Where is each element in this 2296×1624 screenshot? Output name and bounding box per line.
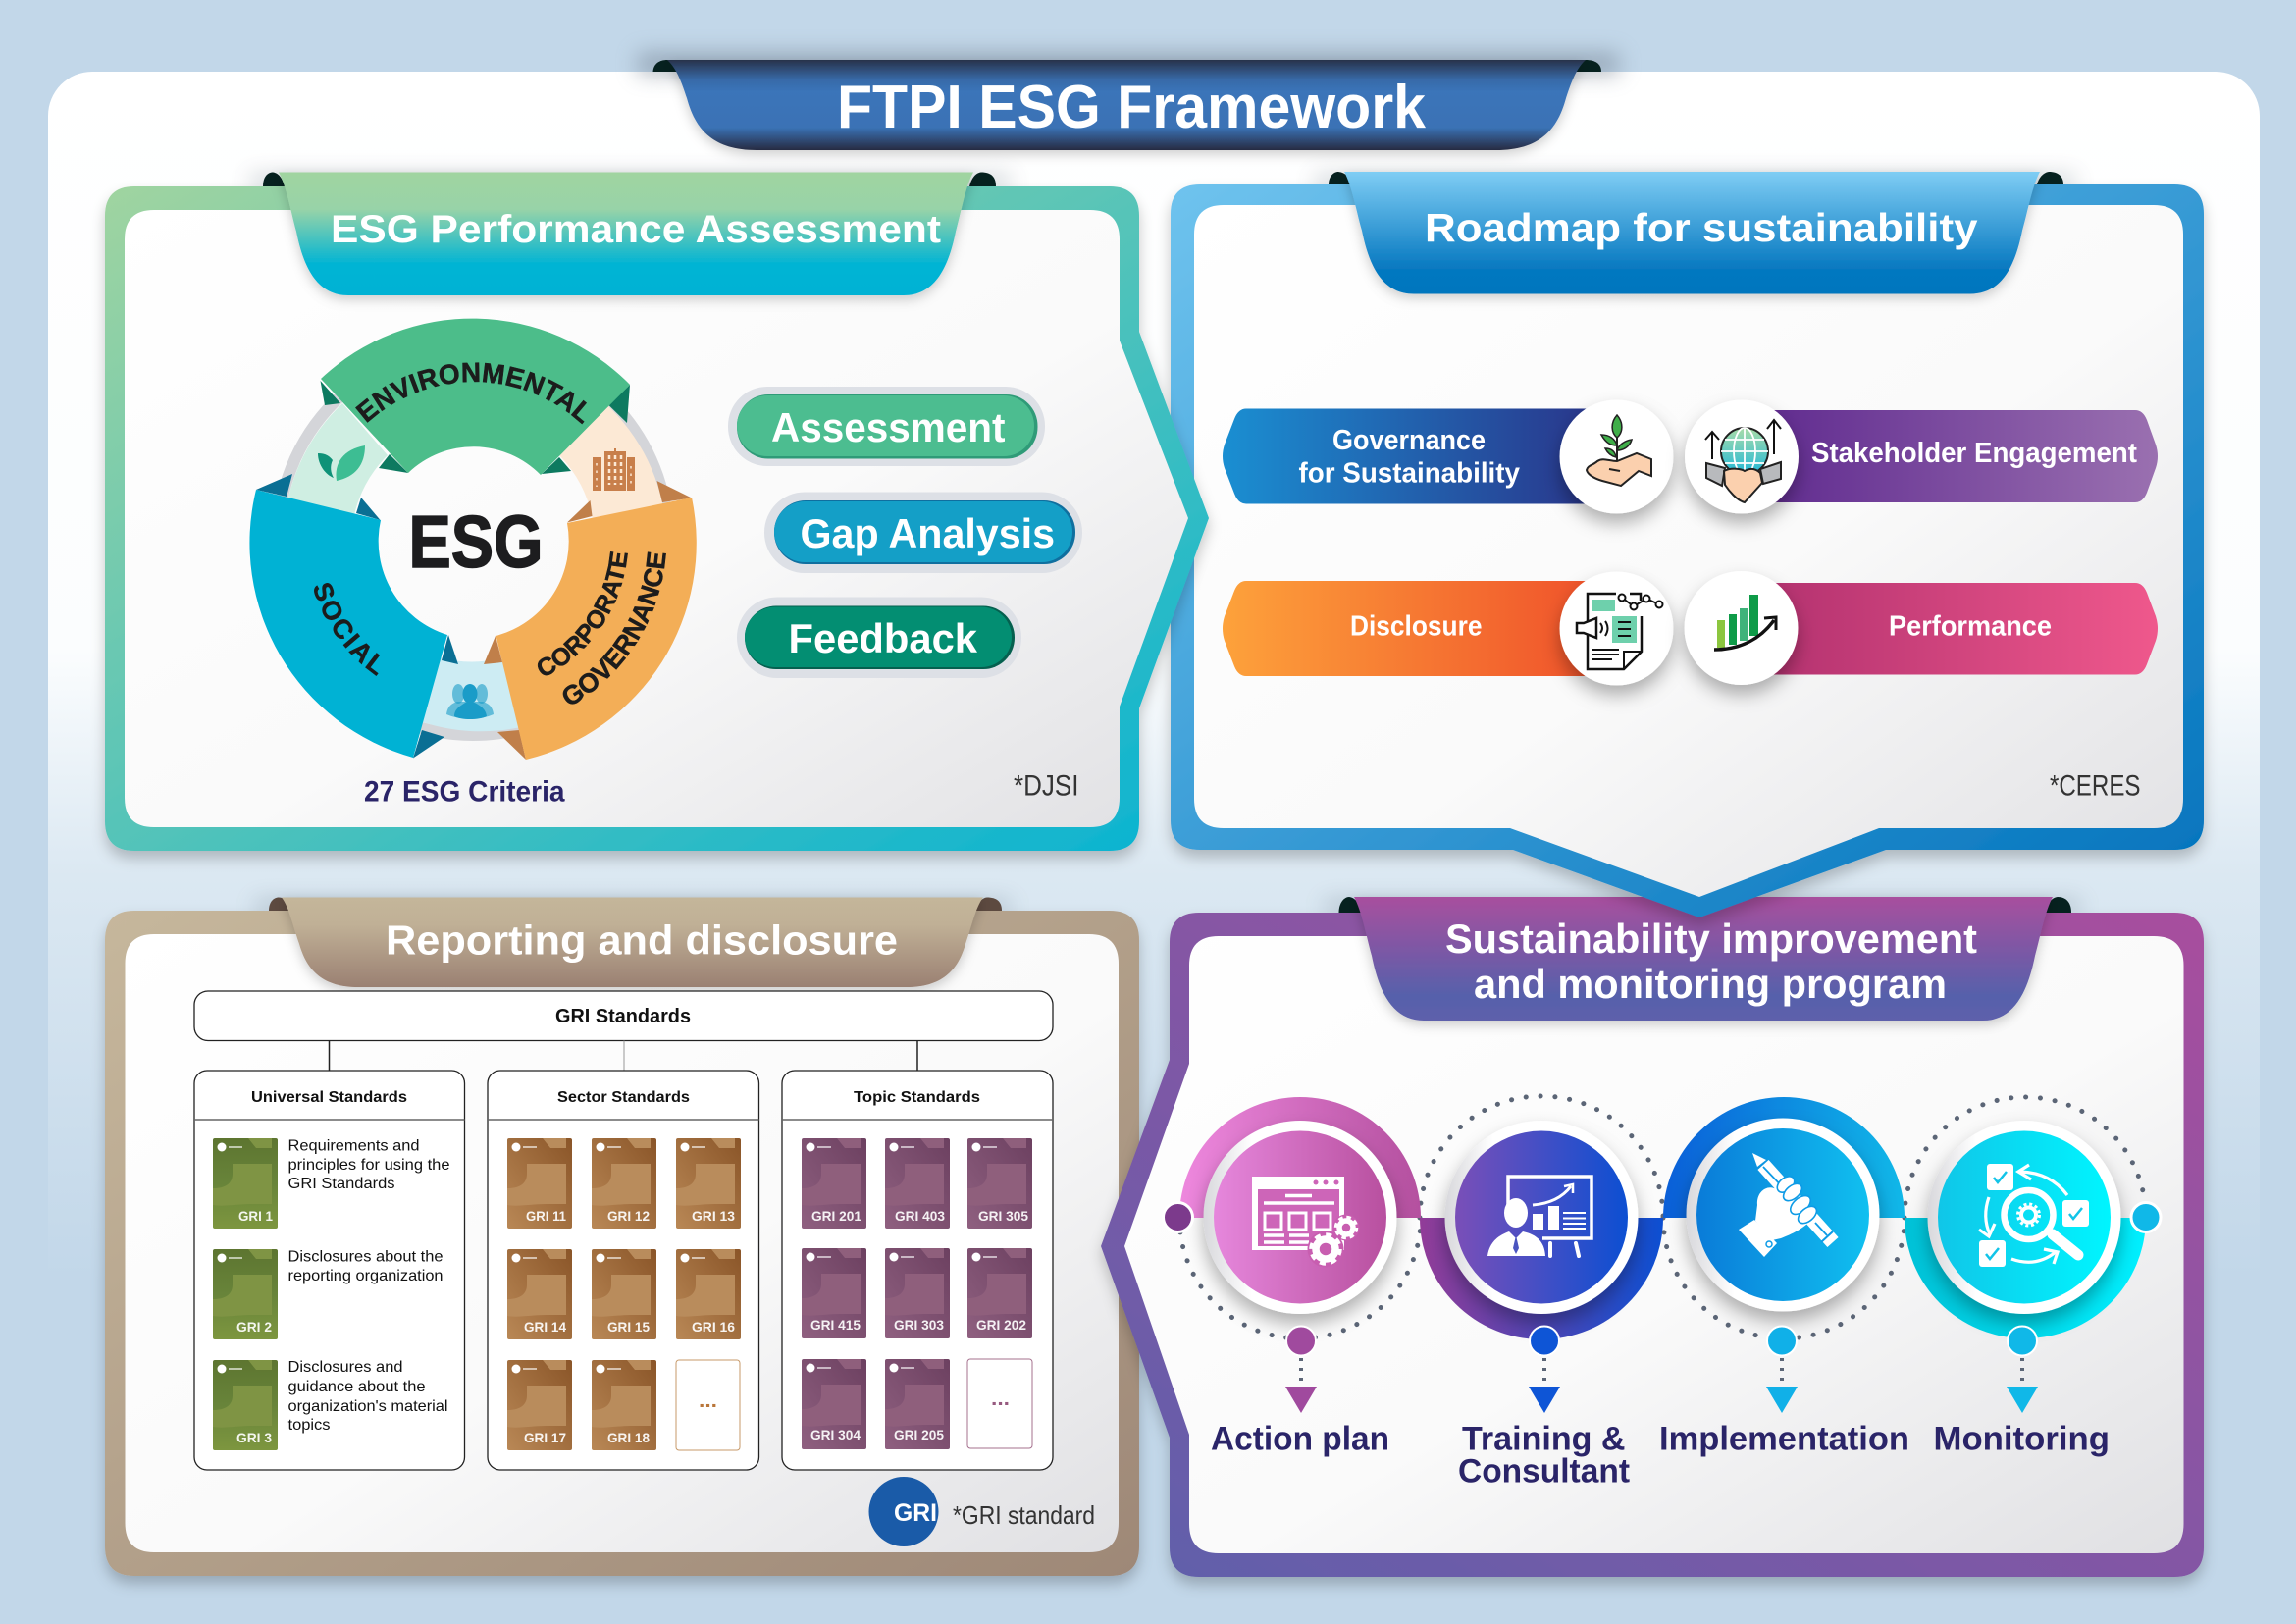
box: topic standards: GRI 303: [894, 1317, 944, 1333]
icon: people: [446, 684, 494, 719]
box: universal standards: guidance about the: [288, 1379, 426, 1395]
box: sector standards: GRI 14: [524, 1319, 566, 1335]
step labels: Training &: [1462, 1421, 1625, 1458]
step labels: Action plan: [1211, 1421, 1389, 1458]
wedge: social icon background: [420, 656, 525, 731]
ribbon: program heading: Sustainability improvement: [1445, 916, 1977, 962]
step labels: Implementation: [1659, 1421, 1909, 1458]
wedge: environment icon background: [285, 403, 388, 520]
box: universal standards: GRI Standards: [288, 1176, 394, 1192]
box: sector standards: Sector Standards: [557, 1089, 690, 1106]
icon: browser with gears: [1252, 1177, 1360, 1268]
box: topic standards: GRI 403: [895, 1208, 945, 1224]
step 1: action plan: [1179, 1097, 1421, 1314]
box: sector standards: GRI 18: [607, 1430, 650, 1445]
box: universal standards: Universal Standards: [251, 1089, 407, 1106]
title ribbon: FTPI ESG Framework: [837, 74, 1426, 141]
banner: performance: Performance: [1889, 610, 2052, 642]
ribbon: ESG performance heading: [263, 173, 996, 295]
chart: GRI standards hierarchy: [194, 991, 1053, 1470]
icon: hand gripping pencil: [1739, 1153, 1833, 1257]
segment: corporate governance: CORPORATE: [538, 551, 628, 675]
ribbon: program heading: and monitoring program: [1474, 961, 1947, 1007]
pill: assessment: [728, 387, 1045, 466]
box: universal standards: Disclosures and: [288, 1359, 402, 1376]
box: topic standards: GRI 202: [976, 1317, 1026, 1333]
box: topic standards: GRI 305: [978, 1208, 1028, 1224]
box: sector standards: GRI 16: [692, 1319, 735, 1335]
caption: 27 ESG criteria: 27 ESG Criteria: [364, 775, 565, 809]
segment: social: [249, 490, 447, 758]
box: topic standards: GRI 304: [810, 1427, 861, 1442]
ribbon: reporting and disclosure heading: Reporting and disclosure: [386, 917, 898, 964]
box: universal standards: GRI 1: [238, 1208, 273, 1224]
box: topic standards: GRI 415: [810, 1317, 861, 1333]
box: universal standards: principles for using the: [288, 1157, 450, 1174]
segment: corporate governance: GOVERNANCE: [563, 551, 666, 705]
banner: performance: [1756, 583, 2158, 675]
dotted rings: [1179, 1096, 2146, 1338]
box: sector standards: GRI 12: [607, 1208, 650, 1224]
marker: action plan: [1285, 1327, 1317, 1413]
GRI logo: GRI: [894, 1499, 937, 1527]
segment: corporate governance: [496, 498, 697, 760]
ribbon: roadmap heading: [1329, 172, 2063, 294]
box: sector standards: [488, 1071, 759, 1470]
source note: CERES: *CERES: [2050, 769, 2141, 803]
banner: disclosure: [1223, 581, 1609, 676]
box: universal standards: reporting organization: [288, 1268, 444, 1284]
marker: training: [1529, 1327, 1560, 1413]
icon: building: [593, 448, 635, 491]
title ribbon: [638, 53, 1619, 150]
GRI Standards top box: [194, 991, 1053, 1040]
segment: social: SOCIAL: [314, 583, 381, 676]
step labels: Monitoring: [1933, 1421, 2110, 1458]
box: universal standards: topics: [288, 1417, 330, 1434]
box: sector standards: GRI 11: [526, 1208, 566, 1224]
panel: reporting and disclosure: [105, 897, 1139, 1576]
banner: disclosure: Disclosure: [1350, 610, 1482, 642]
centre label: ESG: ESG: [408, 500, 544, 583]
box: universal standards: Disclosures about the: [288, 1248, 444, 1266]
source note: GRI standard: *GRI standard: [953, 1500, 1095, 1530]
box: universal standards: GRI 2: [236, 1319, 272, 1335]
step 4: monitoring: [1905, 1121, 2146, 1338]
box: universal standards: GRI 3: [236, 1430, 272, 1445]
step labels: [1211, 1421, 2110, 1490]
step 3: implementation: [1663, 1097, 1905, 1311]
box: universal standards: Requirements and: [288, 1138, 420, 1154]
ribbon: roadmap heading: Roadmap for sustainability: [1425, 205, 1978, 250]
banner: stakeholder engagement: Stakeholder Engagement: [1811, 438, 2137, 469]
box: topic standards: [782, 1071, 1053, 1470]
box: universal standards: [194, 1071, 465, 1470]
box: sector standards: ...: [699, 1390, 717, 1412]
pill: feedback: [737, 597, 1021, 678]
icon: announcement document: [1560, 571, 1674, 685]
step labels: Consultant: [1458, 1452, 1630, 1490]
ribbon: program heading: [1338, 897, 2071, 1021]
box: topic standards: GRI 205: [894, 1427, 944, 1442]
timeline end dots: [1164, 1203, 2161, 1232]
ribbon: reporting and disclosure heading: [269, 897, 1002, 987]
banner: stakeholder engagement: [1756, 410, 2158, 502]
box: topic standards: GRI 201: [811, 1208, 861, 1224]
pill: assessment: Assessment: [771, 404, 1006, 450]
box: sector standards: GRI 13: [692, 1208, 735, 1224]
panel: roadmap for sustainability: [1171, 172, 2204, 917]
icon: leaf: [318, 445, 365, 481]
box: topic standards: ...: [991, 1388, 1010, 1410]
box: sector standards: GRI 15: [607, 1319, 650, 1335]
GRI Standards top box: GRI Standards: [555, 1006, 691, 1027]
box: topic standards: Topic Standards: [854, 1089, 980, 1106]
source note: DJSI: *DJSI: [1014, 769, 1079, 803]
step 2: training and consultant: [1420, 1121, 1663, 1339]
segment: environmental: [321, 318, 630, 475]
icon: presenter at chart board: [1487, 1177, 1592, 1256]
panel: sustainability improvement and monitoring program: [1101, 897, 2204, 1577]
icon: growth chart: [1684, 571, 1798, 685]
panel: ESG performance assessment: [98, 165, 1214, 865]
pill: gap analysis: Gap Analysis: [801, 510, 1055, 556]
pill: feedback: Feedback: [789, 615, 978, 661]
banner: governance for sustainability: [1223, 408, 1609, 504]
ribbon: ESG performance heading: ESG Performance Assessment: [331, 208, 941, 251]
icon: magnifier with check cards: [1979, 1164, 2089, 1267]
wedge: governance icon background: [559, 397, 665, 520]
banner: governance for sustainability: for Sustainability: [1299, 457, 1520, 489]
icon: plant in hand: [1560, 400, 1674, 514]
box: sector standards: GRI 17: [524, 1430, 566, 1445]
banner: governance for sustainability: Governance: [1332, 425, 1486, 456]
segment: environmental: ENVIRONMENTAL: [355, 362, 587, 424]
GRI logo: [869, 1477, 938, 1546]
marker: monitoring: [2007, 1327, 2038, 1413]
chart: ESG wheel: [249, 318, 697, 760]
marker: implementation: [1766, 1327, 1798, 1413]
icon: globe and handshake: [1685, 400, 1799, 514]
pill: gap analysis: [764, 493, 1082, 573]
box: universal standards: organization's material: [288, 1398, 447, 1415]
